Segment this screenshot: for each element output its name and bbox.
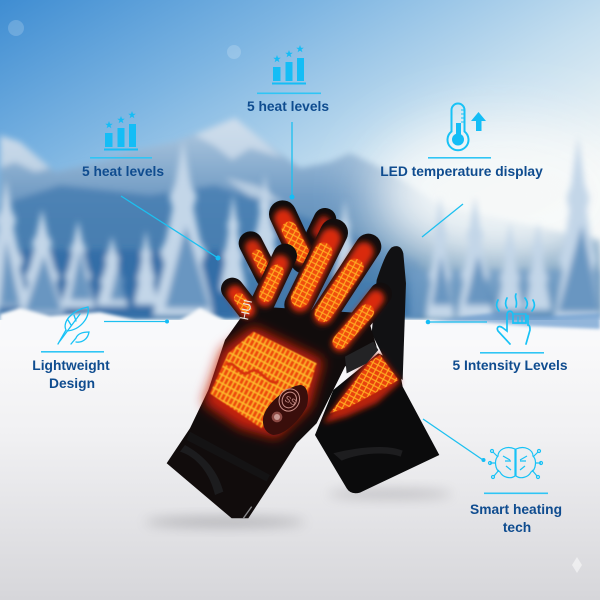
back glove <box>251 214 439 493</box>
logo on glove: HUI <box>237 298 255 321</box>
battery control button: SS <box>283 394 298 408</box>
connector: intensity <box>426 320 487 324</box>
front glove body and cuff <box>167 307 377 518</box>
callout: 5 heat levels (top) <box>247 45 329 200</box>
callout: 5 heat levels (top): 5 heat levels <box>247 99 329 114</box>
callout: 5 Intensity Levels: 5 Intensity Levels <box>452 358 568 373</box>
callout: Smart heating tech <box>423 419 562 535</box>
connector: LED display <box>422 204 463 237</box>
back glove fingers <box>251 214 325 276</box>
background: snowy trees <box>0 136 600 330</box>
connector: smart heating <box>423 419 486 462</box>
callout: Smart heating tech: Smart heating <box>470 502 562 517</box>
icon: bars and stars, left <box>104 111 138 150</box>
front glove <box>167 233 381 518</box>
icon: bars and stars <box>272 45 306 84</box>
connector: left heat levels <box>121 196 220 260</box>
front glove fingers <box>232 233 381 348</box>
icon: feathers <box>58 307 89 344</box>
icon: brain circuit <box>488 448 542 478</box>
callout: 5 heat levels (left): 5 heat levels <box>82 164 164 179</box>
callout: 5 heat levels (left) <box>82 111 220 260</box>
back glove heating zone <box>323 353 401 423</box>
background: distant haze <box>370 120 600 270</box>
battery control button <box>263 385 308 435</box>
callout: Smart heating tech: tech <box>503 520 531 535</box>
callout: LED temperature display <box>380 104 543 237</box>
connector: top heat levels <box>290 122 294 200</box>
icon: hand with heat waves <box>497 294 534 344</box>
background: mountains <box>0 118 600 320</box>
product photo: heated gloves <box>167 214 439 518</box>
front glove palm heating <box>203 327 323 438</box>
icon: thermometer with arrow <box>448 104 486 150</box>
connector: lightweight <box>104 320 169 324</box>
front glove finger heating <box>235 238 376 343</box>
callout: Lightweight Design: Lightweight <box>32 358 110 373</box>
back glove finger heating <box>253 218 324 270</box>
callout: LED temperature display: LED temperature display <box>380 164 543 179</box>
back glove cuff and body <box>315 353 439 493</box>
callout: Lightweight Design: Design <box>49 376 95 391</box>
callout: 5 Intensity Levels <box>426 294 568 373</box>
callout: Lightweight Design <box>32 307 169 391</box>
background: winter sky <box>0 0 600 330</box>
